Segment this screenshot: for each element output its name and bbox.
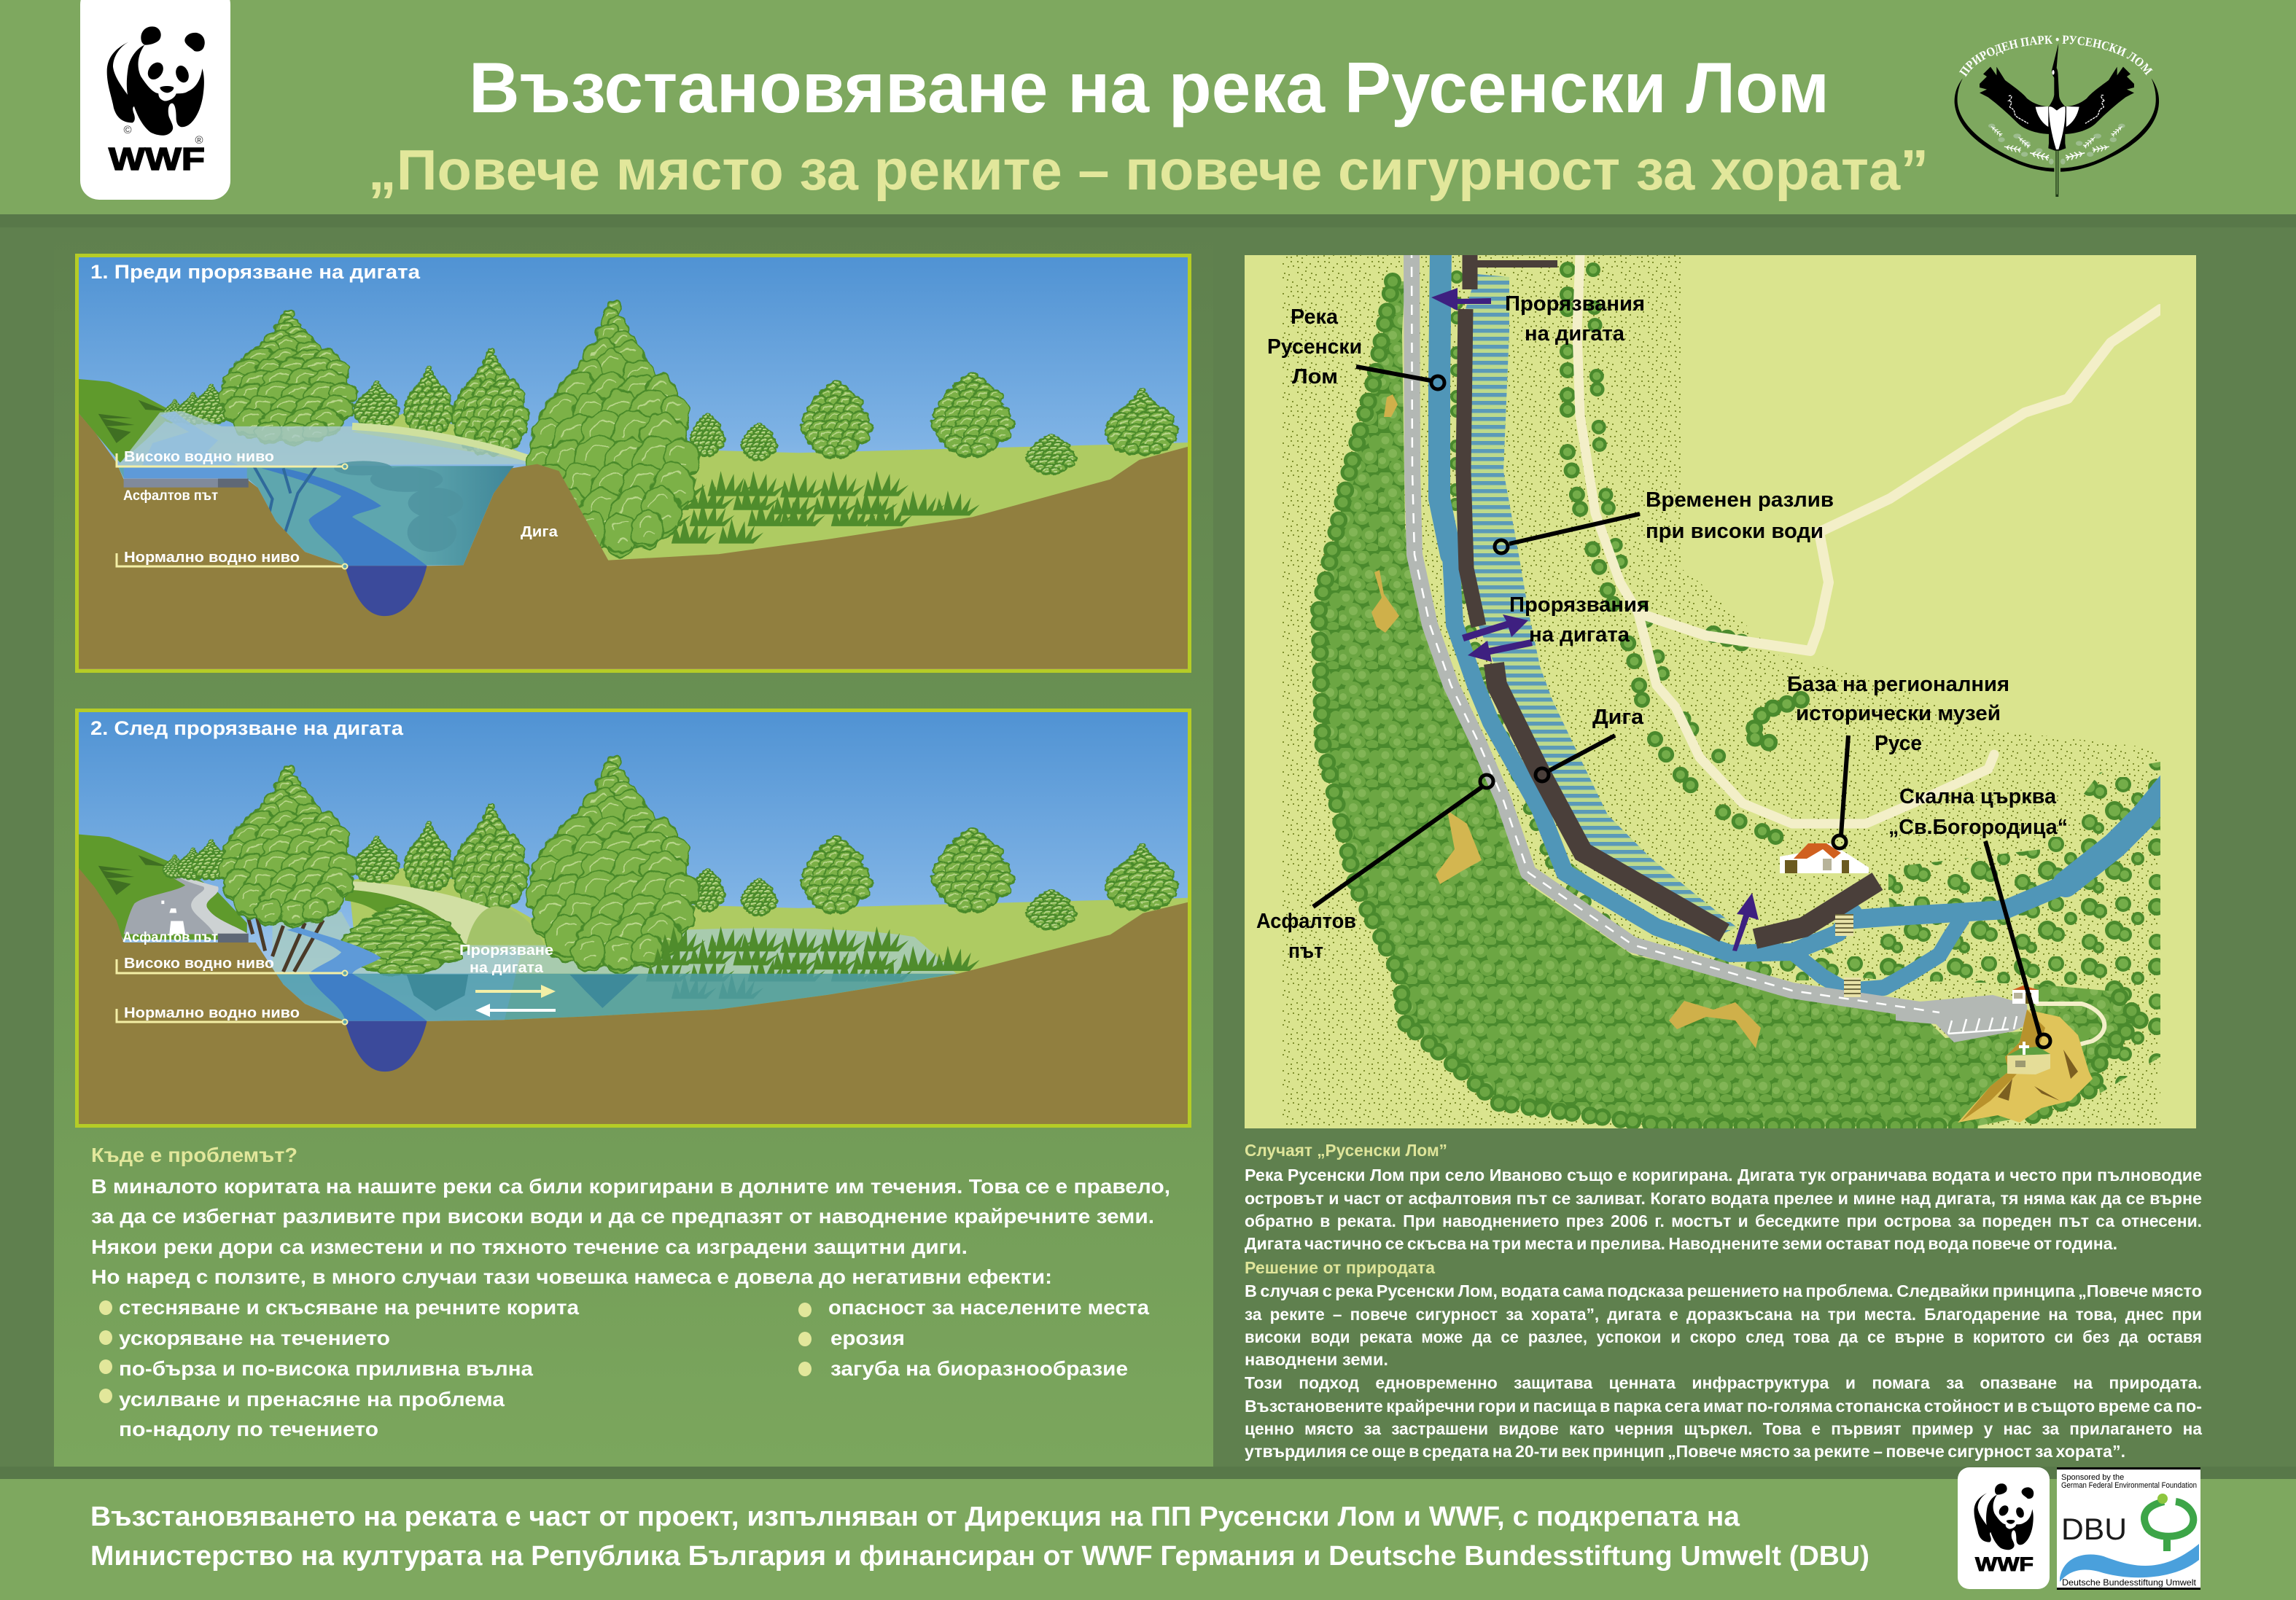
ground xyxy=(78,867,1188,1125)
logo: DBU: German Federal Environmental Foundation xyxy=(2061,1481,2197,1490)
label: high water level: Високо водно ниво xyxy=(124,449,274,465)
flood water below high level xyxy=(273,974,957,1021)
label: asphalt road: Асфалтов път xyxy=(122,930,218,945)
bullet list left xyxy=(99,1296,579,1440)
logo: WWF small xyxy=(1958,1467,2050,1589)
text block: where is the problem xyxy=(91,1144,1170,1440)
river bed xyxy=(345,1021,427,1072)
paragraph xyxy=(1245,1281,2202,1461)
text block: the Rusenski Lom case xyxy=(1245,1141,2202,1461)
intro paragraph: Някои реки дори са изместени и по тяхното течение са изградени защитни диги. xyxy=(91,1236,968,1258)
callout: asphalt road: Асфалтов xyxy=(1256,910,1356,933)
callout: rock church: „Св.Богородица“ xyxy=(1888,816,2068,839)
callout: breaches north: Прорязвания xyxy=(1505,292,1645,316)
callout: museum base xyxy=(1787,673,2009,848)
icon: museum building xyxy=(1780,843,1869,873)
blue channel upper xyxy=(287,927,381,974)
header band xyxy=(0,0,2296,214)
bullet list right: загуба на биоразнообразие xyxy=(830,1357,1128,1380)
bullet list left: стесняване и скъсяване на речните корита xyxy=(119,1296,579,1319)
water below high level xyxy=(118,466,514,566)
bullet list right: опасност за населените места xyxy=(828,1296,1149,1319)
panel: 2. after breach xyxy=(75,709,1191,1128)
landscape scene before breach xyxy=(78,300,1188,669)
panel frame xyxy=(77,255,1190,671)
callout: river: Река xyxy=(1291,305,1339,329)
label: normal water level xyxy=(117,1005,347,1025)
landscape scene after breach xyxy=(78,755,1188,1125)
bullet list left: ускоряване на течението xyxy=(119,1327,390,1349)
callout: asphalt road: път xyxy=(1288,940,1323,963)
water surface above high level xyxy=(118,411,541,466)
paragraph: наводнени земи. xyxy=(1245,1350,1388,1369)
rocks xyxy=(1371,394,2093,1123)
callout: museum base: Русе xyxy=(1875,732,1922,755)
callout: breaches north: на дигата xyxy=(1525,322,1625,346)
icon: small house at parking xyxy=(2012,986,2039,1004)
callout: river xyxy=(1267,305,1444,389)
callout: river: Русенски xyxy=(1267,335,1362,359)
blue channel xyxy=(262,468,427,566)
tree reflections xyxy=(334,461,463,552)
logo: WWF panda: © xyxy=(123,124,132,136)
callout: temporary overflow: Временен разлив xyxy=(1646,488,1834,512)
white sprigs xyxy=(1990,125,2003,137)
title: Възстановяване на река Русенски Лом xyxy=(469,47,1829,128)
label: breach of the dike: на дигата xyxy=(470,960,544,976)
paragraph: за реките – повече сигурност за хората”, дигата е доразкъсана на три места. Благодарение на това, днес при xyxy=(1245,1305,2202,1324)
paragraph: обратно в реката. При наводнението през 2006 г. мостът и беседките при острова за пореден път са отнесени. xyxy=(1245,1211,2202,1230)
paragraph: В случая с река Русенски Лом, водата сама подсказа решението на проблема. Следвайки принципа „Повече място xyxy=(1245,1281,2202,1300)
callout: museum base: База на регионалния xyxy=(1787,673,2009,696)
ground xyxy=(78,413,1188,669)
callout: breaches middle xyxy=(1509,593,1649,647)
map panel xyxy=(1245,248,2196,1128)
callout: asphalt road xyxy=(1256,775,1493,963)
cream footpaths xyxy=(1577,255,2160,1044)
logo: WWF panda xyxy=(80,0,230,200)
arrow: outflow xyxy=(475,985,556,998)
river bed xyxy=(345,566,427,616)
logo: nature park Rusenski Lom xyxy=(1954,35,2160,197)
paragraph: Този подход едновременно защитава ценната инфраструктура и помага за опазване на природата. xyxy=(1245,1373,2202,1392)
panel heading: 2. След прорязване на дигата xyxy=(90,717,404,739)
label: asphalt road: Асфалтов път xyxy=(123,488,218,504)
asphalt road xyxy=(1412,248,2028,1042)
callout: museum base: исторически музей xyxy=(1796,702,2001,725)
paragraph: високи води реката може да се разлее, успокои и скоро след това да се върне в коритото си без да оставя xyxy=(1245,1327,2202,1346)
paragraph: Възстановените крайречни гори и пасища в парка сега имат по-голяма стопанска стойност и в същото време са по- xyxy=(1245,1397,2202,1416)
panel: 1. before breach xyxy=(75,254,1191,673)
heading: Къде е проблемът? xyxy=(91,1144,297,1166)
bridges xyxy=(1835,914,1861,997)
logo: DBU: Sponsored by the xyxy=(2061,1473,2124,1482)
footer band xyxy=(0,1467,2296,1600)
panel frame xyxy=(77,710,1190,1125)
paragraph: утвърдилия се още в средата на 20-ти век принцип „Повече място за реките – повече сигурност за хората”. xyxy=(1245,1442,2125,1461)
callout: dike xyxy=(1536,706,1644,781)
label: high water level xyxy=(117,449,347,469)
main tree on dike xyxy=(526,300,697,556)
logo: nature park Rusenski Lom: ПРИРОДЕН ПАРК • РУСЕНСКИ ЛОМ xyxy=(1958,35,2153,77)
neck and body xyxy=(2048,43,2066,151)
paragraph: Дигата частично се скъсва на три места и прелива. Наводнените земи остават под вода повече от година. xyxy=(1245,1234,2117,1253)
river xyxy=(1439,248,2176,991)
bullet list left: по-бърза и по-висока приливна вълна xyxy=(119,1357,533,1380)
label: normal water level: Нормално водно ниво xyxy=(124,550,300,566)
paragraph xyxy=(1245,1166,2202,1253)
arrow: return flow xyxy=(475,1004,556,1017)
callout: breaches north xyxy=(1505,292,1645,346)
logo: WWF panda: ® xyxy=(195,134,203,147)
callout: river: Лом xyxy=(1292,365,1338,389)
bullet list right xyxy=(798,1296,1149,1380)
tree rows along paths xyxy=(1455,270,1801,969)
callout: temporary overflow xyxy=(1495,488,1834,553)
logo: WWF small: WWF xyxy=(1975,1553,2034,1575)
flood water above high level xyxy=(273,912,957,974)
paragraph: ценно място за застрашени видове като черния щъркел. Това е първият пример у нас за прилагането на xyxy=(1245,1419,2202,1438)
label: normal water level: Нормално водно ниво xyxy=(124,1005,300,1021)
intro paragraph: за да се избегнат разливите при високи води и да се предпазят от наводнение крайречните земи. xyxy=(91,1205,1154,1228)
intro paragraph xyxy=(91,1175,1170,1288)
arrow: breach north xyxy=(1431,288,1491,311)
label: normal water level xyxy=(117,550,347,569)
logo: DBU: DBU xyxy=(2061,1512,2127,1546)
label: dike: Дига xyxy=(521,524,559,540)
far dike with breach xyxy=(345,881,530,945)
main tree xyxy=(526,755,697,973)
east woodland xyxy=(1568,762,2160,1093)
callout: rock church xyxy=(1888,785,2068,1047)
callout: rock church: Скална църква xyxy=(1899,785,2057,808)
logo: DBU xyxy=(2057,1467,2200,1590)
trunks xyxy=(244,901,323,972)
icon: rock church xyxy=(2007,1042,2050,1074)
footer text xyxy=(90,1502,1869,1572)
pale leaves xyxy=(1988,124,2125,165)
bullet list right: ерозия xyxy=(830,1327,905,1349)
intro paragraph: В миналото коритата на нашите реки са били коригирани в долните им течения. Това се е правело, xyxy=(91,1175,1170,1198)
callout: temporary overflow: при високи води xyxy=(1646,520,1824,543)
arrow: breach middle inflow xyxy=(1468,639,1533,662)
logo: WWF panda: WWF xyxy=(109,141,205,177)
bullet list left: усилване и пренасяне на проблема xyxy=(119,1388,505,1410)
callout: breaches middle: Прорязвания xyxy=(1509,593,1649,617)
label: high water level xyxy=(117,956,347,975)
panel heading: 1. Преди прорязване на дигата xyxy=(90,261,421,283)
winding road xyxy=(124,867,249,943)
arrow: breach middle outflow xyxy=(1462,614,1528,641)
flood stripes xyxy=(1463,274,1737,933)
label: breach of the dike xyxy=(459,943,553,976)
heading: Случаят „Русенски Лом” xyxy=(1245,1141,1447,1160)
label: breach of the dike: Прорязване xyxy=(459,943,553,959)
paragraph: Река Русенски Лом при село Иваново също е коригирана. Дигата тук ограничава водата и често при пълноводие xyxy=(1245,1166,2202,1185)
arrow: breach south xyxy=(1732,893,1759,951)
west forest xyxy=(1319,281,2140,1126)
footer text: Възстановяването на реката е част от проект, изпълняван от Дирекция на ПП Русенски Лом и WWF, с подкрепата на xyxy=(90,1502,1740,1532)
ring xyxy=(1955,78,2054,172)
footer text: Министерство на културата на Република България и финансиран от WWF Германия и Deutsche Bundesstiftung Umwelt (DBU) xyxy=(90,1541,1869,1572)
logo: DBU: Deutsche Bundesstiftung Umwelt xyxy=(2062,1577,2197,1588)
wings xyxy=(1980,67,2050,134)
heading: Решение от природата xyxy=(1245,1258,1435,1277)
label: high water level: Високо водно ниво xyxy=(124,956,274,972)
paragraph: островът и част от асфалтовия път се заливат. Когато водата прелее и мине над дигата, тя няма как да се върне xyxy=(1245,1189,2202,1208)
speckled meadow xyxy=(1283,255,2160,1126)
callout: dike: Дига xyxy=(1592,706,1644,729)
dike xyxy=(1463,248,1877,939)
left column background xyxy=(54,227,1213,1467)
bullet list left: по-надолу по течението xyxy=(119,1418,378,1440)
callout: breaches middle: на дигата xyxy=(1529,623,1630,647)
subtitle: „Повече място за реките – повече сигурност за хората” xyxy=(368,138,1929,202)
asphalt road section xyxy=(124,478,249,488)
intro paragraph: Но наред с ползите, в много случаи тази човешка намеса е довела до негативни ефекти: xyxy=(91,1265,1052,1288)
